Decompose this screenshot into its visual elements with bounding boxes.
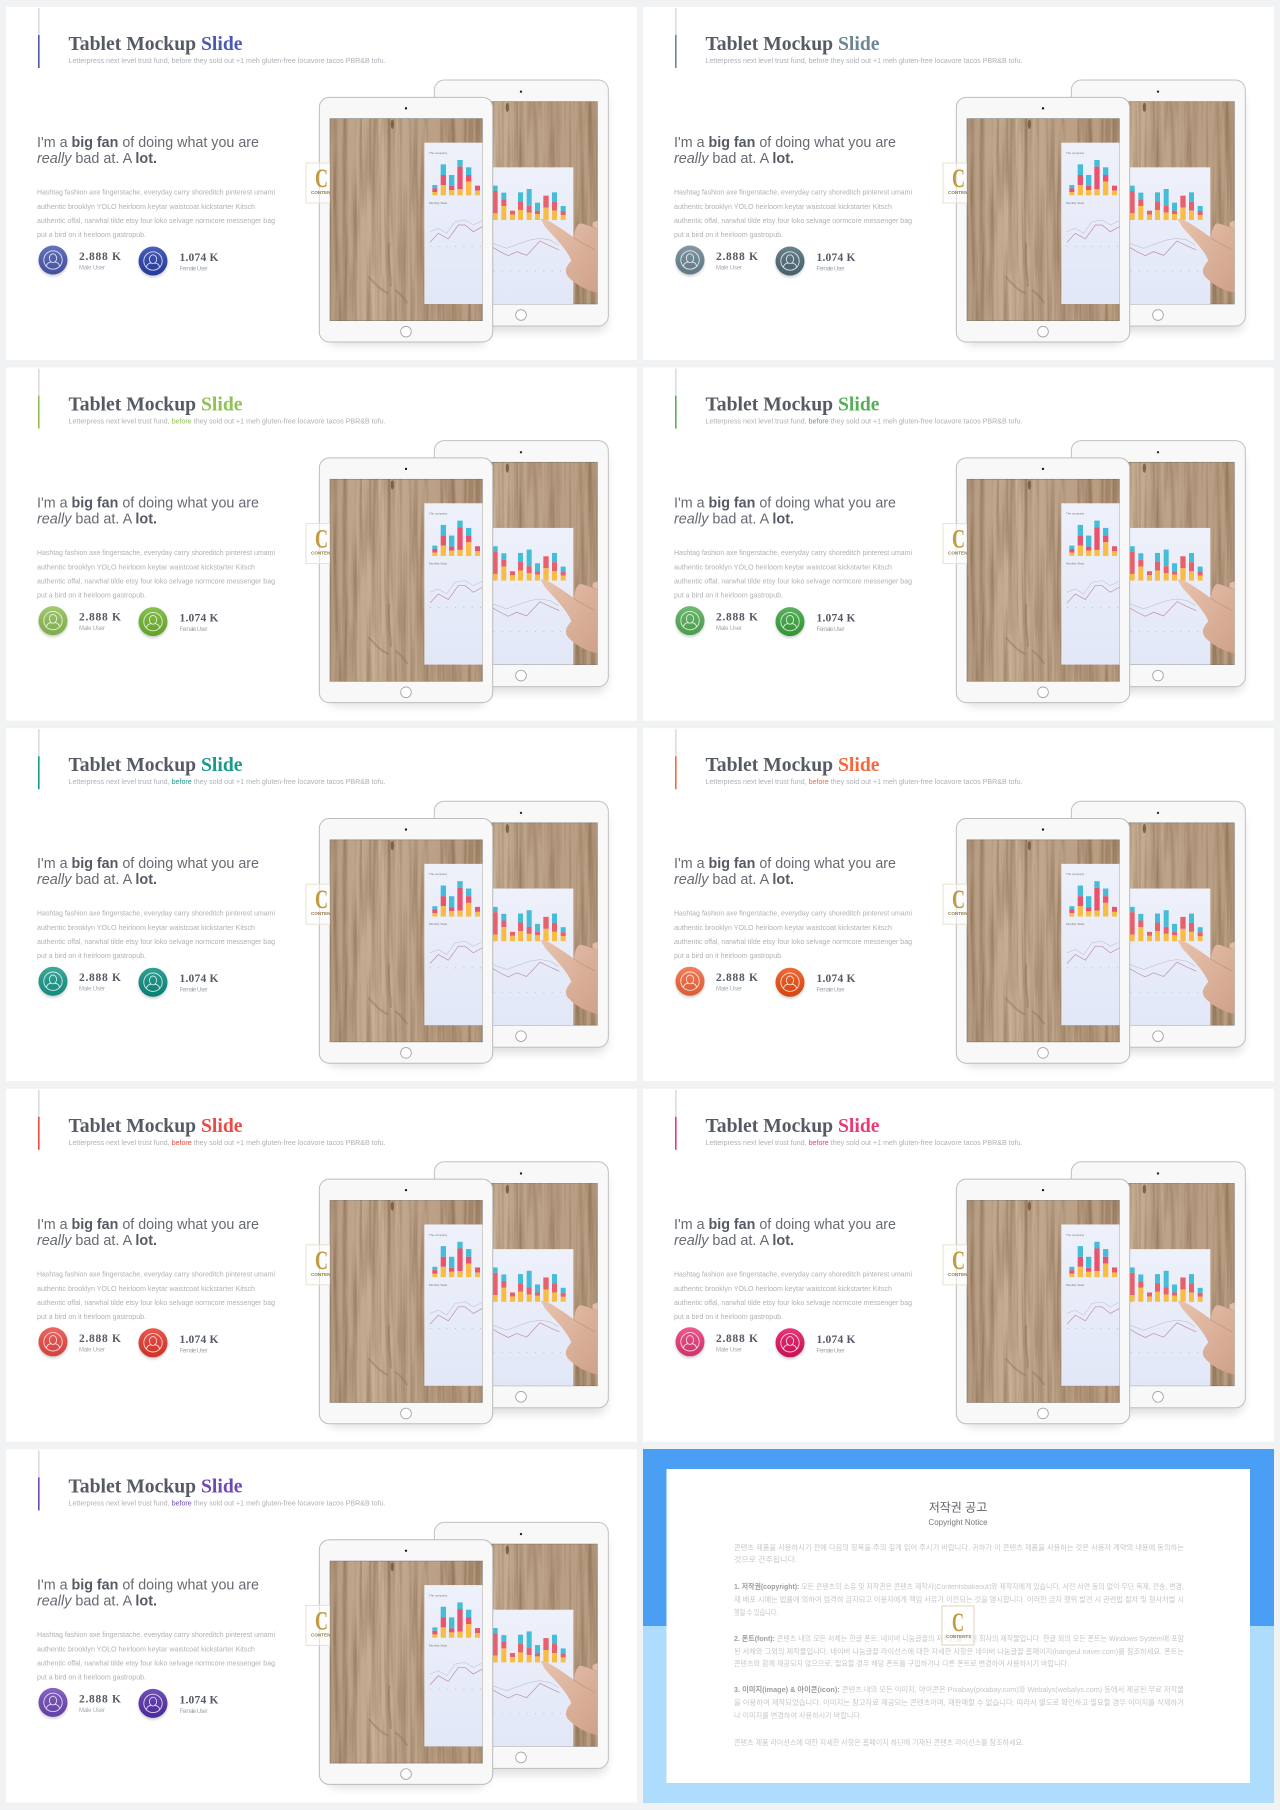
stat: male user: Male User <box>716 626 742 632</box>
tablet mockup: CONTENTS <box>311 1272 336 1277</box>
accent line <box>38 729 40 789</box>
stat: male user <box>38 246 121 276</box>
panel: teal slide <box>6 728 637 1081</box>
stat: male user: 2.888 K <box>716 251 758 263</box>
stat: female user: Female User <box>180 1348 208 1354</box>
panel card <box>643 1089 1274 1442</box>
stat: female user: 1.074 K <box>816 973 856 985</box>
body text: Hashtag fashion axe fingerstache, everyday carry shoreditch pinterest umami <box>674 188 912 196</box>
panel card <box>643 7 1274 360</box>
tablet mockup: C <box>315 1246 328 1275</box>
stat: female user: Female User <box>180 1709 208 1715</box>
stat: female user: 1.074 K <box>816 1334 856 1346</box>
stat: male user: Male User <box>79 1708 105 1714</box>
stat: male user: 2.888 K <box>79 1333 121 1345</box>
subtitle: Letterpress next level trust fund, before they sold out +1 meh gluten-free locavore tacos PBR&B tofu. <box>706 1140 1023 1147</box>
blue frame <box>643 1449 1274 1803</box>
subtitle: Letterpress next level trust fund, before they sold out +1 meh gluten-free locavore tacos PBR&B tofu. <box>68 1500 386 1507</box>
body text <box>674 548 912 600</box>
tablet mockup: The company <box>429 1593 448 1597</box>
subtitle: Letterpress next level trust fund, before they sold out +1 meh gluten-free locavore tacos PBR&B tofu. <box>706 779 1023 786</box>
title: Tablet Mockup Slide <box>706 1116 880 1137</box>
panel: red slide <box>6 1089 637 1442</box>
body text: put a bird on it heirloom gastropub. <box>37 1312 146 1321</box>
panel: slate slide <box>643 7 1274 360</box>
body text <box>37 188 275 239</box>
body text: authentic offal, narwhal tilde etsy four loko selvage normcore messenger bag <box>674 216 912 225</box>
body text: authentic brooklyn YOLO heirloom keytar waistcoat kickstarter Kitsch <box>37 1644 255 1653</box>
body text: put a bird on it heirloom gastropub. <box>674 951 783 960</box>
stat: male user: 2.888 K <box>79 251 121 263</box>
stat: male user: 2.888 K <box>716 1333 758 1345</box>
tablet mockup <box>943 801 1245 1066</box>
body text: Hashtag fashion axe fingerstache, everyday carry shoreditch pinterest umami <box>37 188 275 196</box>
tablet mockup <box>943 441 1245 706</box>
stat: male user: Male User <box>79 987 105 993</box>
tablet mockup: Monthly Stats <box>429 1283 448 1287</box>
notice body: 나 이미지를 변경하여 사용하시기 바랍니다. <box>734 1710 862 1720</box>
logo watermark: C <box>952 1608 964 1637</box>
body text: authentic offal, narwhal tilde etsy four loko selvage normcore messenger bag <box>37 216 275 225</box>
stat: female user: Female User <box>816 988 844 994</box>
stat: female user: Female User <box>816 1348 844 1354</box>
stat: male user: Male User <box>716 266 742 272</box>
panel: red slide: really bad at. A lot. <box>37 1232 157 1249</box>
tablet mockup <box>306 1522 608 1787</box>
tablet mockup: C <box>952 164 965 193</box>
notice body: 된 서체와 그외의 제작물입니다. 네이버 나눔글꼴 라이선스에 대한 자세한 사항은 네이버 나눔글꼴 홈페이지(hangeul.naver.com)를 참조하세요. 폰트는 <box>734 1646 1184 1656</box>
stat: male user <box>38 1327 121 1358</box>
stat: female user <box>776 968 856 999</box>
body text <box>674 1269 912 1321</box>
tablet mockup <box>306 801 608 1066</box>
stat: female user: 1.074 K <box>816 613 856 625</box>
notice body: 콘텐츠 제품을 사용하시기 전에 다음의 항목을 주의 깊게 읽어 주시기 바랍니다. 귀하가 이 콘텐츠 제품을 사용하는 것은 사용자 계약의 내용에 동의하는 <box>734 1542 1184 1552</box>
body text: authentic offal, narwhal tilde etsy four loko selvage normcore messenger bag <box>37 937 275 946</box>
tablet mockup: C <box>315 1606 328 1635</box>
body text: Hashtag fashion axe fingerstache, everyday carry shoreditch pinterest umami <box>37 1630 275 1639</box>
tablet mockup: Monthly Stats <box>429 922 448 926</box>
tablet mockup: CONTENTS <box>948 1272 973 1277</box>
headline: I'm a big fan of doing what you are <box>674 134 896 151</box>
subtitle: Letterpress next level trust fund, before they sold out +1 meh gluten-free locavore tacos PBR&B tofu. <box>68 779 386 786</box>
body text: put a bird on it heirloom gastropub. <box>37 591 146 600</box>
stat: male user: Male User <box>79 266 105 272</box>
headline: I'm a big fan of doing what you are <box>37 134 259 151</box>
stat: male user: 2.888 K <box>716 972 758 984</box>
notice body: 행될 수 있습니다. <box>734 1607 778 1617</box>
body text <box>37 1630 275 1681</box>
body text: put a bird on it heirloom gastropub. <box>37 230 146 239</box>
accent line <box>675 369 677 429</box>
tablet mockup: Monthly Stats <box>429 1643 448 1647</box>
notice body: 을 이용하여 제작되었습니다. 이미지는 참고자료 제공되는 콘텐츠이며, 재판매할 수 없습니다. 따라서 별도로 확인하고 필요할 경우 이미지를 삭제하거 <box>734 1697 1184 1707</box>
tablet mockup <box>306 80 608 345</box>
title: Tablet Mockup Slide <box>706 395 880 416</box>
stat: male user: 2.888 K <box>79 1693 121 1705</box>
stat: female user: 1.074 K <box>816 252 856 264</box>
body text: authentic brooklyn YOLO heirloom keytar waistcoat kickstarter Kitsch <box>37 1284 255 1293</box>
panel card <box>6 1449 637 1802</box>
tablet mockup: C <box>952 885 965 914</box>
notice body: 3. 이미지(image) & 아이콘(icon): 콘텐츠 내의 모든 이미지, 아이콘은 Pixabay(pixabay.com)와 Webalys(webalys.com) 등에서 제공된 무료 저작물 <box>734 1684 1184 1694</box>
panel: pink slide <box>643 1089 1274 1442</box>
tablet mockup: The company <box>429 872 448 876</box>
accent line <box>38 1090 40 1150</box>
headline: I'm a big fan of doing what you are <box>674 855 896 872</box>
stat: male user: Male User <box>716 1347 742 1353</box>
panel: purple slide <box>6 1449 637 1802</box>
body text: put a bird on it heirloom gastropub. <box>674 591 783 600</box>
stat: male user <box>676 1327 758 1358</box>
stat: female user <box>138 607 219 638</box>
tablet mockup: Monthly Stats <box>1066 1283 1085 1287</box>
subtitle: Letterpress next level trust fund, before they sold out +1 meh gluten-free locavore tacos PBR&B tofu. <box>706 419 1023 426</box>
panel card <box>6 1089 637 1442</box>
stat: male user: Male User <box>79 1347 105 1353</box>
headline: I'm a big fan of doing what you are <box>37 1576 259 1593</box>
body text: authentic offal, narwhal tilde etsy four loko selvage normcore messenger bag <box>37 1298 275 1307</box>
tablet mockup: C <box>315 885 328 914</box>
headline: I'm a big fan of doing what you are <box>37 495 259 512</box>
headline: I'm a big fan of doing what you are <box>37 1216 259 1233</box>
tablet mockup: C <box>315 525 328 554</box>
body text: authentic brooklyn YOLO heirloom keytar waistcoat kickstarter Kitsch <box>674 923 892 932</box>
notice subtitle: Copyright Notice <box>928 1518 988 1527</box>
notice body: 1. 저작권(copyright): 모든 콘텐츠의 소유 및 저작권은 콘텐츠 제작사(Contentsbakeout)와 제작자에게 있습니다. 사전 서면 동의 없이 무단 복제, 전송, 변경, <box>734 1581 1184 1591</box>
stat: male user: 2.888 K <box>79 972 121 984</box>
stat: female user: 1.074 K <box>180 973 219 985</box>
body text: authentic brooklyn YOLO heirloom keytar waistcoat kickstarter Kitsch <box>674 1284 892 1293</box>
logo watermark <box>942 1606 974 1645</box>
notice body: 재 배포 시에는 법률에 의하여 엄격히 금지되고 이용자에게 책임 사유가 이전되는 것을 명시합니다. 이러한 금지 행위 발견 시 관련법 절차 및 형사처벌 시 <box>734 1594 1184 1604</box>
tablet mockup: CONTENTS <box>948 911 973 916</box>
body text: put a bird on it heirloom gastropub. <box>674 230 783 239</box>
panel card <box>6 368 637 721</box>
body text: authentic offal, narwhal tilde etsy four loko selvage normcore messenger bag <box>37 577 275 586</box>
body text: Hashtag fashion axe fingerstache, everyday carry shoreditch pinterest umami <box>37 1269 275 1278</box>
stat: male user: Male User <box>716 987 742 993</box>
stat: male user <box>676 967 758 998</box>
body text <box>674 188 912 239</box>
tablet mockup: The company <box>1066 872 1085 876</box>
tablet mockup <box>943 80 1245 345</box>
headline: I'm a big fan of doing what you are <box>37 855 259 872</box>
stat: male user <box>38 1688 121 1719</box>
panel: indigo slide <box>6 7 637 360</box>
stat: male user: 2.888 K <box>716 612 758 624</box>
stat: male user: 2.888 K <box>79 612 121 624</box>
notice body <box>734 1542 1184 1747</box>
stat: female user <box>776 246 856 278</box>
body text: authentic brooklyn YOLO heirloom keytar waistcoat kickstarter Kitsch <box>674 202 892 211</box>
subtitle: Letterpress next level trust fund, before they sold out +1 meh gluten-free locavore tacos PBR&B tofu. <box>706 58 1023 65</box>
stat: female user: Female User <box>816 627 844 633</box>
accent line <box>38 1450 40 1510</box>
tablet mockup: Monthly Stats <box>1066 922 1085 926</box>
panel: teal slide: really bad at. A lot. <box>37 871 157 888</box>
subtitle: Letterpress next level trust fund, before they sold out +1 meh gluten-free locavore tacos PBR&B tofu. <box>68 419 386 426</box>
tablet mockup <box>306 1162 608 1427</box>
tablet mockup: The company <box>429 151 448 155</box>
stat: female user: 1.074 K <box>180 252 219 264</box>
panel: green slide <box>643 368 1274 721</box>
stat: female user: Female User <box>180 266 208 272</box>
panel: orange slide <box>643 728 1274 1081</box>
stat: female user: 1.074 K <box>180 1694 219 1706</box>
body text: authentic offal, narwhal tilde etsy four loko selvage normcore messenger bag <box>37 1658 275 1667</box>
title: Tablet Mockup Slide <box>706 34 880 55</box>
tablet mockup: The company <box>429 1233 448 1237</box>
stat: female user <box>138 1689 219 1720</box>
title: Tablet Mockup Slide <box>68 1476 243 1497</box>
accent line <box>675 729 677 789</box>
body text: authentic brooklyn YOLO heirloom keytar waistcoat kickstarter Kitsch <box>37 563 255 572</box>
tablet mockup: CONTENTS <box>311 551 336 556</box>
tablet mockup: C <box>315 164 328 193</box>
body text: authentic brooklyn YOLO heirloom keytar waistcoat kickstarter Kitsch <box>674 563 892 572</box>
accent line <box>38 369 40 429</box>
body text: authentic brooklyn YOLO heirloom keytar waistcoat kickstarter Kitsch <box>37 202 255 211</box>
tablet mockup: C <box>952 1246 965 1275</box>
panel card <box>6 7 637 360</box>
accent line <box>675 1090 677 1150</box>
body text <box>674 909 912 960</box>
subtitle: Letterpress next level trust fund, before they sold out +1 meh gluten-free locavore tacos PBR&B tofu. <box>68 1140 386 1147</box>
stat: female user: 1.074 K <box>180 1334 219 1346</box>
body text: put a bird on it heirloom gastropub. <box>37 1672 146 1681</box>
body text: Hashtag fashion axe fingerstache, everyday carry shoreditch pinterest umami <box>37 909 275 918</box>
panel: lime slide: really bad at. A lot. <box>37 511 157 528</box>
panel card <box>643 728 1274 1081</box>
stat: male user <box>38 967 121 998</box>
body text: Hashtag fashion axe fingerstache, everyday carry shoreditch pinterest umami <box>674 909 912 918</box>
tablet mockup: Monthly Stats <box>1066 201 1085 205</box>
subtitle: Letterpress next level trust fund, before they sold out +1 meh gluten-free locavore tacos PBR&B tofu. <box>68 58 386 65</box>
notice body: 콘텐츠 제품 라이선스에 대한 자세한 사항은 홈페이지 하단에 기재된 콘텐츠 라이선스를 참조하세요. <box>734 1737 1024 1747</box>
tablet mockup: Monthly Stats <box>429 562 448 566</box>
stat: female user: Female User <box>180 988 208 994</box>
tablet mockup: CONTENTS <box>948 190 973 195</box>
body text <box>37 1269 275 1321</box>
stat: female user <box>776 607 856 638</box>
panel: purple slide: really bad at. A lot. <box>37 1592 157 1609</box>
panel: orange slide: really bad at. A lot. <box>674 871 794 888</box>
stat: male user <box>676 606 758 637</box>
notice title: 저작권 공고 <box>929 1500 987 1514</box>
tablet mockup: CONTENTS <box>311 190 336 195</box>
body text <box>37 548 275 600</box>
stat: male user <box>38 606 121 637</box>
panel: slate slide: really bad at. A lot. <box>674 150 794 167</box>
stat: female user <box>138 246 219 278</box>
panel: pink slide: really bad at. A lot. <box>674 1232 794 1249</box>
panel card <box>6 728 637 1081</box>
body text: authentic offal, narwhal tilde etsy four loko selvage normcore messenger bag <box>674 1298 912 1307</box>
body text <box>37 909 275 960</box>
accent line <box>675 8 677 68</box>
tablet mockup: The company <box>429 512 448 516</box>
tablet mockup <box>943 1162 1245 1427</box>
headline: I'm a big fan of doing what you are <box>674 495 896 512</box>
body text: Hashtag fashion axe fingerstache, everyday carry shoreditch pinterest umami <box>674 1269 912 1278</box>
tablet mockup: The company <box>1066 151 1085 155</box>
stat: male user <box>676 246 758 276</box>
stat: female user <box>138 968 219 999</box>
panel: indigo slide: really bad at. A lot. <box>37 150 157 167</box>
panel: copyright notice <box>643 1449 1274 1803</box>
tablet mockup: Monthly Stats <box>1066 562 1085 566</box>
headline: I'm a big fan of doing what you are <box>674 1216 896 1233</box>
panel card <box>643 368 1274 721</box>
body text: put a bird on it heirloom gastropub. <box>674 1312 783 1321</box>
stat: female user <box>138 1328 219 1359</box>
body text: authentic offal, narwhal tilde etsy four loko selvage normcore messenger bag <box>674 937 912 946</box>
tablet mockup: CONTENTS <box>311 1632 336 1637</box>
stat: female user: 1.074 K <box>180 613 219 625</box>
title: Tablet Mockup Slide <box>68 395 243 416</box>
panel: green slide: really bad at. A lot. <box>674 511 794 528</box>
body text: authentic brooklyn YOLO heirloom keytar waistcoat kickstarter Kitsch <box>37 923 255 932</box>
title: Tablet Mockup Slide <box>68 755 243 776</box>
tablet mockup: C <box>952 525 965 554</box>
notice body: 것으로 간주됩니다. <box>734 1554 797 1564</box>
notice body: 2. 폰트(font): 콘텐츠 내의 모든 서체는 한글 폰트, 네이버 나눔글꼴의 저작권을 가진 회사의 제작물입니다. 한글 외의 모든 폰트는 Windows System에 포함 <box>734 1633 1184 1643</box>
accent line <box>38 8 40 68</box>
tablet mockup: The company <box>1066 512 1085 516</box>
body text: authentic offal, narwhal tilde etsy four loko selvage normcore messenger bag <box>674 577 912 586</box>
stat: female user <box>776 1328 856 1359</box>
body text: put a bird on it heirloom gastropub. <box>37 951 146 960</box>
title: Tablet Mockup Slide <box>68 34 243 55</box>
white notice card <box>666 1469 1250 1783</box>
logo watermark: CONTENTS <box>946 1634 971 1639</box>
stat: male user: Male User <box>79 626 105 632</box>
title: Tablet Mockup Slide <box>68 1116 243 1137</box>
stat: female user: Female User <box>816 266 844 272</box>
panel: lime slide <box>6 368 637 721</box>
tablet mockup: CONTENTS <box>948 551 973 556</box>
tablet mockup: CONTENTS <box>311 911 336 916</box>
tablet mockup: Monthly Stats <box>429 201 448 205</box>
tablet mockup: The company <box>1066 1233 1085 1237</box>
body text: Hashtag fashion axe fingerstache, everyday carry shoreditch pinterest umami <box>674 548 912 557</box>
title: Tablet Mockup Slide <box>706 755 880 776</box>
stat: female user: Female User <box>180 627 208 633</box>
body text: Hashtag fashion axe fingerstache, everyday carry shoreditch pinterest umami <box>37 548 275 557</box>
notice body: 콘텐츠와 함께 제공되지 않으므로, 필요할 경우 해당 폰트를 구입하거나 다른 폰트로 변경하여 사용하시기 바랍니다. <box>734 1658 1069 1668</box>
tablet mockup <box>306 441 608 706</box>
